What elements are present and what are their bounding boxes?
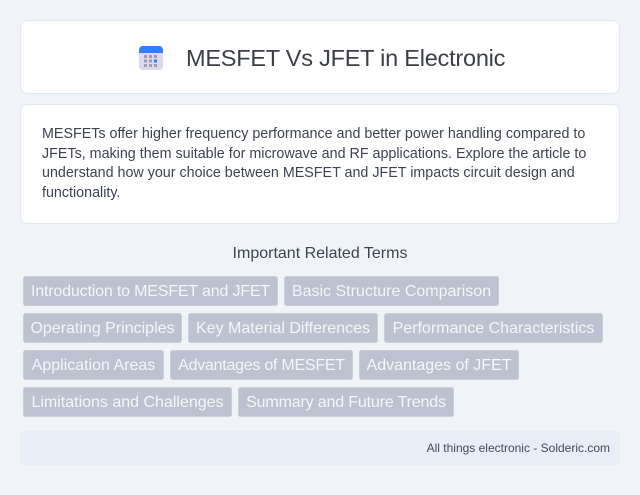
footer bar: [20, 431, 620, 465]
tag list: Limitations and Challenges: [31, 394, 224, 411]
tag list: Summary and Future Trends: [246, 394, 446, 411]
summary text: understand how your choice between MESFET and JFET impacts circuit design and: [42, 165, 575, 181]
heading: related terms: Important Related Terms: [233, 245, 407, 262]
tag list: [23, 276, 603, 417]
summary text: functionality.: [42, 184, 120, 200]
header card: [20, 20, 620, 94]
title: MESFET Vs JFET in Electronic: [186, 45, 505, 71]
tag list: Basic Structure Comparison: [292, 283, 491, 300]
summary text: MESFETs offer higher frequency performance and better power handling compared to: [42, 126, 585, 142]
summary text: JFETs, making them suitable for microwave and RF applications. Explore the article to: [42, 146, 586, 162]
tag list: Performance Characteristics: [393, 320, 594, 337]
footer credit: All things electronic - Solderic.com: [427, 441, 610, 455]
tag list: Key Material Differences: [196, 320, 370, 337]
tag list: Introduction to MESFET and JFET: [31, 283, 270, 300]
tag list: Application Areas: [32, 357, 155, 374]
icon: calendar: [139, 46, 163, 70]
tag list: Advantages of JFET: [367, 357, 511, 374]
summary card: [20, 104, 620, 224]
tag list: Operating Principles: [30, 320, 175, 337]
tag list: Advantages of MESFET: [178, 357, 345, 374]
summary text: [42, 126, 586, 200]
